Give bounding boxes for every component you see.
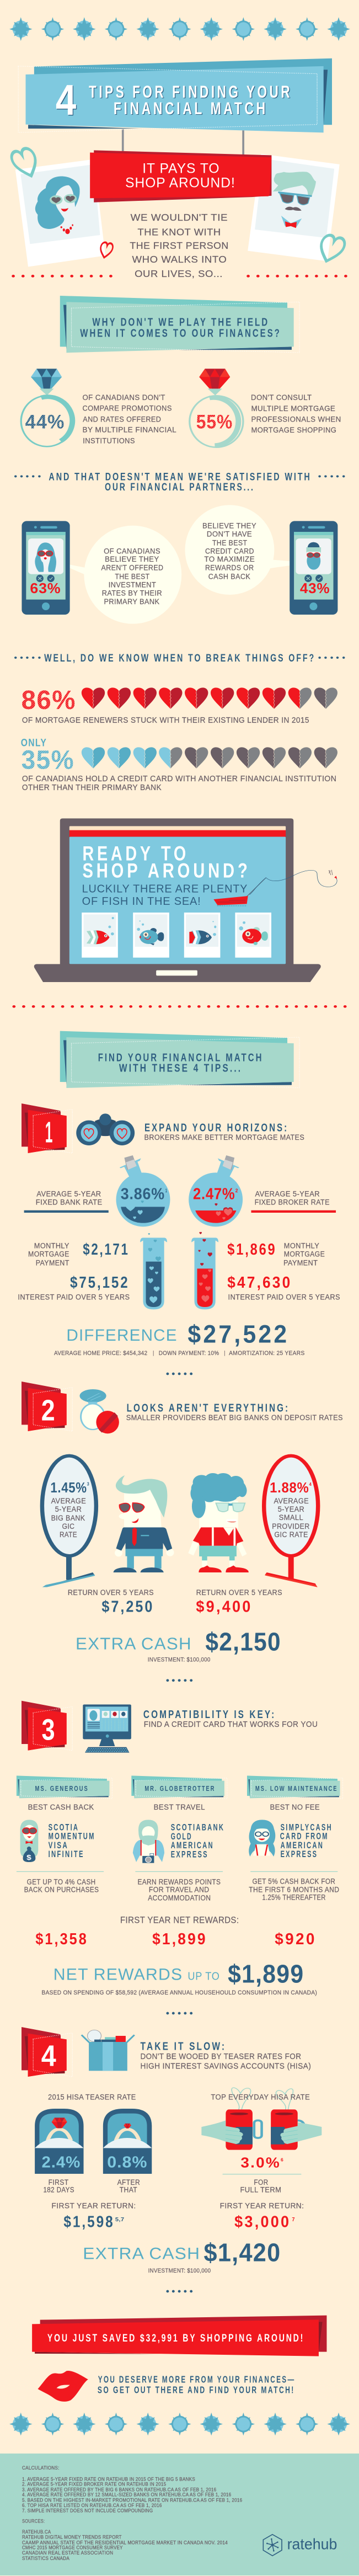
tip 1 heading: BROKERS MAKE BETTER MORTGAGE MATES (144, 1133, 304, 1142)
net reward values: $920 (275, 1930, 317, 1948)
stat: only 35% hearts (21, 737, 337, 792)
footnotes text: CMHC 2015 MORTGAGE CONSUMER SURVEY (22, 2545, 123, 2550)
mirror: small provider: 5-YEAR (278, 1505, 304, 1514)
icon: moving box (82, 2030, 135, 2071)
panel: teaser rate: THAT (120, 2186, 137, 2194)
panel: teaser rate (35, 2093, 152, 2194)
first-year return: teaser (51, 2202, 136, 2231)
difference total (66, 1320, 289, 1348)
tip 3 badge (22, 1701, 72, 1751)
panel: everyday rate: FULL TERM (240, 2186, 281, 2194)
tip 2 heading (126, 1402, 343, 1422)
assumptions (54, 1350, 305, 1357)
stat: only 35% hearts: OTHER THAN THEIR PRIMARY BANK (22, 783, 162, 792)
card column: ms. generous (17, 1775, 112, 1894)
mint banner: find your match (60, 1031, 299, 1088)
bank return: RETURN OVER 5 YEARS (68, 1588, 154, 1597)
tip 4 heading: DON'T BE WOOED BY TEASER RATES FOR (141, 2052, 301, 2061)
numeral 4: 4 (56, 76, 76, 124)
header section (9, 17, 350, 280)
card column: ms. low maintenance: BEST NO FEE (270, 1803, 320, 1812)
card description (138, 1878, 221, 1902)
extra cash total: $2,150 (205, 1628, 281, 1656)
broker figures (227, 1240, 340, 1302)
55% description: DON'T CONSULT (251, 393, 312, 402)
subheading: and that doesn't mean (14, 471, 345, 493)
label: bank rate (24, 1190, 109, 1213)
net reward values (35, 1930, 317, 1948)
fish card 3 (184, 913, 220, 958)
card name: AMERICAN (281, 1840, 324, 1850)
bubble: 43% text: REWARDS OR (205, 564, 254, 572)
panel: teaser rate: 182 DAYS (43, 2186, 74, 2194)
44% description: AND RATES OFFERED (83, 415, 161, 424)
dots divider (166, 2012, 192, 2014)
tip 2 (22, 1382, 343, 1656)
stat: 86% hearts (22, 685, 337, 725)
44% description: BY MULTIPLE FINANCIAL (82, 426, 176, 434)
tip 1 heading (144, 1122, 304, 1142)
mirror: small provider: AVERAGE (274, 1497, 309, 1506)
footnotes text: 2. AVERAGE 5-YEAR FIXED BROKER RATE ON RATEHUB IN 2015 (22, 2482, 166, 2487)
intro text: OUR LIVES, SO... (135, 269, 223, 280)
card description: FOR TRAVEL AND (149, 1886, 209, 1894)
bank figures: PAYMENT (36, 1259, 69, 1267)
fish card 1 (82, 913, 118, 958)
sign poles (122, 129, 244, 155)
investment note: INVESTMENT: $100,000 (148, 2267, 211, 2274)
card name (171, 1822, 224, 1859)
label: broker rate (251, 1190, 336, 1213)
card description (24, 1878, 99, 1894)
footnotes text: STATISTICS CANADA (22, 2556, 69, 2561)
first-year return: teaser: 5,7 (115, 2217, 124, 2223)
flask: bank rate: 1 (165, 1188, 167, 1194)
red banner: SHOP AROUND! (125, 175, 235, 190)
section: why don't we play the field (14, 296, 345, 624)
character: woman (188, 1473, 249, 1572)
card name: EXPRESS (171, 1849, 208, 1859)
55% description (251, 393, 341, 435)
bubble: 63% text: AREN'T OFFERED (101, 564, 163, 572)
bank figures: MORTGAGE (28, 1250, 69, 1258)
footnotes text: 1. AVERAGE 5-YEAR FIXED RATE ON RATEHUB IN 2015 OF THE BIG 5 BANKS (22, 2476, 195, 2482)
closing section (32, 2202, 326, 2402)
tip 4 badge (22, 2027, 72, 2077)
panel: everyday rate: 3.0% (240, 2154, 281, 2171)
footnotes text: CALCULATIONS: (22, 2465, 60, 2471)
bubble: 63% text: RATES BY THEIR (102, 589, 162, 598)
mirror: small provider: 4 (309, 1482, 312, 1487)
phone: woman 63% (22, 521, 70, 615)
red dotted divider (14, 1002, 346, 1010)
bubble: 63% text: OF CANADIANS (104, 547, 160, 556)
boat and fishing line (213, 870, 337, 906)
tip 4 heading (141, 2040, 311, 2071)
laptop: OF FISH IN THE SEA! (82, 894, 201, 907)
bubble: 43% text: CREDIT CARD (205, 547, 254, 556)
extra cash total (76, 1628, 281, 1656)
bubble: 63% text: PRIMARY BANK (104, 598, 160, 606)
bank figures: $75,152 (70, 1273, 130, 1291)
mirror: big bank: BIG BANK (51, 1514, 85, 1523)
provider return: RETURN OVER 5 YEARS (196, 1588, 282, 1597)
mirror: big bank (42, 1456, 96, 1587)
broker figures: $1,869 (227, 1240, 277, 1258)
first-year return: everyday: 7 (292, 2217, 295, 2223)
panel: everyday rate: FOR (254, 2178, 269, 2187)
laptop headline: READY TO (82, 842, 189, 865)
section: break things off (14, 652, 345, 792)
phone: woman 63%: 63% (30, 581, 61, 596)
card name: SCOTIA (49, 1822, 79, 1832)
net rewards and tip 4 (22, 1930, 322, 2194)
intro text: THE FIRST PERSON (130, 241, 229, 252)
net rewards total (53, 1960, 304, 1988)
card column: ms. generous: MS. GENEROUS (35, 1784, 89, 1793)
mirror: big bank: GIC (62, 1522, 74, 1531)
card description: 1.25% THEREAFTER (262, 1894, 326, 1902)
card name: VISA (49, 1840, 68, 1850)
fish card 2 (133, 913, 169, 958)
44% description: OF CANADIANS DON'T (82, 393, 165, 402)
intro text: WE WOULDN'T TIE (131, 213, 228, 223)
flask: broker rate: 2.47% (193, 1185, 235, 1203)
mugs with hands (201, 2088, 322, 2150)
assumptions: DOWN PAYMENT: 10% (159, 1350, 219, 1357)
mirror: big bank: 5-YEAR (55, 1505, 82, 1514)
card name: AMERICAN (171, 1840, 214, 1850)
mirror: big bank: 1.45% (50, 1480, 87, 1496)
footnotes text: RATEHUB DIGITAL MONEY TRENDS REPORT (22, 2534, 122, 2540)
tip 3 badge: 3 (42, 1713, 55, 1746)
first-year return: everyday: $3,000 (234, 2213, 291, 2231)
bubble: 63% text: BELIEVE THEY (105, 555, 159, 564)
44% description: INSTITUTIONS (83, 437, 135, 445)
tip 1 badge (22, 1103, 72, 1153)
footnotes text: 5. BASED ON THE HIGHEST IN-MARKET PROMOTIONAL RATE ON RATEHUB.CA AS OF FEB 1, 2016 (22, 2497, 242, 2503)
footnotes text: 3. AVERAGE RATE OFFERED BY THE BIG 6 BANKS ON RATEHUB.CA AS OF FEB 1, 2016 (22, 2487, 216, 2492)
bank figures: $2,171 (83, 1240, 130, 1258)
investment note: INVESTMENT: $100,000 (148, 1656, 211, 1663)
dots divider (166, 1373, 192, 1375)
net reward values: $1,899 (152, 1930, 207, 1948)
mirror: small provider (264, 1456, 318, 1587)
card column: ms. low maintenance (247, 1775, 343, 1902)
intro text: WHO WALKS INTO (132, 255, 227, 265)
bottom star row (9, 2413, 350, 2435)
bubble: 43% text: DON'T HAVE (207, 530, 252, 538)
bubble: 63% text: INVESTMENT (109, 581, 156, 589)
stat: 44% ring: 44% (25, 412, 65, 433)
difference total: DIFFERENCE (66, 1326, 178, 1345)
mirror: big bank: RATE (60, 1530, 77, 1539)
hearts (9, 147, 347, 264)
phone: man 43% (290, 521, 337, 615)
bubble: 43% text: CASH BACK (208, 573, 250, 581)
footnotes text: CANADIAN REAL ESTATE ASSOCIATION (22, 2550, 113, 2556)
first-year return: everyday (220, 2202, 304, 2231)
broker figures: $47,630 (227, 1273, 292, 1291)
character: ms. low maintenance (249, 1820, 275, 1857)
card name: GOLD (171, 1831, 192, 1842)
footnotes text: 7. SIMPLE INTEREST DOES NOT INCLUDE COMPOUNDING (22, 2508, 153, 2513)
panel: everyday rate (201, 2088, 322, 2194)
banner text: IT PAYS TO (142, 161, 220, 176)
tip 3 heading: COMPATIBILITY IS KEY: (143, 1708, 276, 1720)
stat: only 35% hearts: 35% (22, 744, 74, 775)
mirror: small provider: PROVIDER (272, 1522, 310, 1531)
bubble: 63% text: THE BEST (115, 573, 150, 581)
footnotes text (22, 2465, 242, 2561)
mint banner: find your match: WITH THESE 4 TIPS... (119, 1062, 242, 1074)
tip 4 badge: 4 (41, 2039, 56, 2072)
flask: bank rate (116, 1155, 170, 1226)
subheading: and that doesn't mean: OUR FINANCIAL PARTNERS... (105, 481, 255, 493)
ratehub logo (263, 2535, 337, 2556)
intro text: THE KNOT WITH (138, 227, 221, 238)
first-year return: teaser: $1,598 (63, 2213, 115, 2231)
card description: EARN REWARDS POINTS (138, 1878, 221, 1886)
assumptions: AVERAGE HOME PRICE: $454,342 (54, 1350, 147, 1357)
polaroid: man (248, 154, 340, 262)
card column: mr. globetrotter (131, 1775, 227, 1902)
broker figures: MORTGAGE (284, 1250, 325, 1258)
laptop sub text: LUCKILY THERE ARE PLENTY (82, 882, 248, 895)
extra cash total: EXTRA CASH (76, 1635, 192, 1653)
ring box 2.4% (35, 2109, 84, 2174)
icon: compact (79, 1389, 119, 1433)
stat: 44% ring (21, 369, 73, 446)
laptop: SHOP AROUND? (82, 859, 251, 882)
bubble: 43% text: THE BEST (212, 539, 247, 547)
bubble: 43% text: TO MAXIMIZE (204, 555, 255, 564)
stat: 55% ring (190, 369, 243, 447)
red banner (90, 150, 271, 202)
mirror: small provider: GIC RATE (274, 1530, 308, 1539)
footnotes text: 6. TOP HISA RATE LISTED ON RATEHUB.CA AS OF FEB 1, 2016 (22, 2503, 162, 2508)
bubble: 63% text (56, 526, 181, 624)
net reward values: $1,358 (35, 1930, 88, 1948)
bank figures (18, 1240, 130, 1302)
closing message (98, 2374, 296, 2396)
title banner (18, 58, 332, 132)
44% description (82, 393, 176, 445)
net rewards total: UP TO (187, 1970, 220, 1982)
test tube: bank (140, 1233, 167, 1309)
character: mr. globetrotter (133, 1820, 164, 1863)
fish card 4 (235, 913, 271, 958)
net rewards heading: FIRST YEAR NET REWARDS: (120, 1914, 239, 1925)
difference total: $27,522 (187, 1320, 289, 1348)
panel: teaser rate: 2015 HISA TEASER RATE (48, 2093, 136, 2102)
extra cash total: $1,420 (204, 2238, 281, 2267)
panel: everyday rate: 6 (281, 2157, 283, 2163)
dots divider (166, 1679, 192, 1682)
panel: teaser rate: AFTER (117, 2178, 140, 2187)
footnotes text: SOURCES: (22, 2518, 45, 2524)
fish cards (82, 913, 271, 958)
dots divider (166, 2290, 192, 2292)
assumptions: AMORTIZATION: 25 YEARS (229, 1350, 305, 1357)
character: ms. generous (20, 1820, 38, 1862)
mirror: big bank: AVERAGE (51, 1497, 86, 1506)
tip 4 heading: TAKE IT SLOW: (141, 2040, 226, 2052)
card column: mr. globetrotter: BEST TRAVEL (154, 1803, 205, 1812)
top star row (9, 17, 350, 41)
intro text (130, 213, 229, 280)
net rewards total: NET REWARDS (53, 1966, 183, 1983)
icon: binoculars (76, 1113, 135, 1145)
card description (249, 1878, 339, 1902)
tip 3 heading (143, 1708, 318, 1729)
label: broker rate: FIXED BROKER RATE (255, 1198, 330, 1207)
footnotes text: RATEHUB.CA (22, 2529, 51, 2535)
flask: bank rate: 3.86% (121, 1185, 165, 1203)
mirror: small provider: SMALL (279, 1513, 303, 1522)
ring box 2.4%: 2.4% (42, 2153, 81, 2171)
bank figures: INTEREST PAID OVER 5 YEARS (18, 1293, 130, 1302)
card name: SCOTIABANK (171, 1822, 224, 1832)
panel: teaser rate: FIRST (49, 2178, 69, 2187)
test tube: broker (191, 1232, 218, 1309)
first-year return: everyday: FIRST YEAR RETURN: (220, 2202, 304, 2210)
footnotes text: 4. AVERAGE RATE OFFERED BY 12 SMALL-SIZED BANKS ON RATEHUB.CA AS OF FEB 1, 2016 (22, 2492, 231, 2497)
flask: broker rate (189, 1155, 243, 1226)
card description: ACCOMMODATION (148, 1894, 211, 1902)
bank return: $7,250 (101, 1598, 154, 1615)
laptop (34, 818, 337, 982)
card name: INFINITE (49, 1849, 84, 1859)
flask: broker rate: 2 (235, 1188, 238, 1194)
phone: man 43%: 43% (300, 581, 330, 596)
bank return (68, 1588, 154, 1615)
label: broker rate: AVERAGE 5-YEAR (255, 1190, 320, 1198)
bubble: 43% text (185, 505, 309, 595)
ring box 0.8% (103, 2109, 152, 2174)
character: man (114, 1475, 174, 1572)
mirror: small provider: 1.88% (270, 1480, 309, 1496)
card name: MOMENTUM (49, 1831, 95, 1841)
label: bank rate: FIXED BANK RATE (36, 1198, 103, 1207)
card description: BACK ON PURCHASES (24, 1886, 99, 1894)
card name (49, 1822, 95, 1859)
card description: GET UP TO 4% CASH (27, 1878, 96, 1886)
stat: 86% hearts: 86% (22, 685, 76, 715)
net rewards total: $1,899 (228, 1960, 304, 1988)
44% description: COMPARE PROMOTIONS (82, 404, 172, 413)
label: bank rate: AVERAGE 5-YEAR (36, 1190, 101, 1198)
broker figures: MONTHLY (284, 1242, 319, 1250)
ratehub logo: ratehub (287, 2536, 337, 2553)
card name (280, 1822, 333, 1859)
bank figures: MONTHLY (34, 1242, 69, 1250)
red dotted rows (13, 272, 347, 280)
icon: computer (83, 1704, 131, 1753)
card name: EXPRESS (281, 1849, 318, 1859)
ring box 0.8%: 0.8% (107, 2153, 147, 2171)
first-year return: teaser: FIRST YEAR RETURN: (51, 2202, 136, 2210)
tip 1 (18, 1103, 340, 1375)
extra cash total: EXTRA CASH (83, 2244, 200, 2263)
card column: mr. globetrotter: MR. GLOBETROTTER (144, 1784, 215, 1793)
extra cash total (83, 2238, 281, 2267)
panel: everyday rate: TOP EVERYDAY HISA RATE (211, 2093, 310, 2102)
stat: only 35% hearts: ONLY (21, 737, 47, 749)
tip 1 badge: 1 (45, 1116, 52, 1149)
mint banner (60, 296, 299, 353)
icon: lips (38, 2371, 88, 2402)
character: ms. generous: $ (26, 1853, 31, 1862)
tip 3 (17, 1656, 343, 1925)
footer panel (0, 2454, 359, 2575)
provider return (196, 1588, 282, 1615)
mirror: big bank: 3 (87, 1481, 89, 1487)
stat: 55% ring: 55% (196, 412, 233, 433)
55% description: MULTIPLE MORTGAGE (251, 404, 335, 413)
tip 2 badge (22, 1382, 72, 1431)
bubble: 43% text: BELIEVE THEY (202, 522, 256, 530)
tip 2 badge: 2 (41, 1394, 55, 1427)
provider return: $9,400 (196, 1598, 253, 1615)
section: laptop (14, 818, 346, 1088)
footnotes text: CAAMP ANNUAL STATE OF THE RESIDENTIAL MORTGAGE MARKET IN CANADA NOV. 2014 (22, 2540, 228, 2545)
card column: ms. generous: BEST CASH BACK (28, 1803, 94, 1812)
savings banner (32, 2316, 326, 2356)
polaroid: woman (15, 159, 105, 267)
broker figures: PAYMENT (283, 1259, 318, 1267)
